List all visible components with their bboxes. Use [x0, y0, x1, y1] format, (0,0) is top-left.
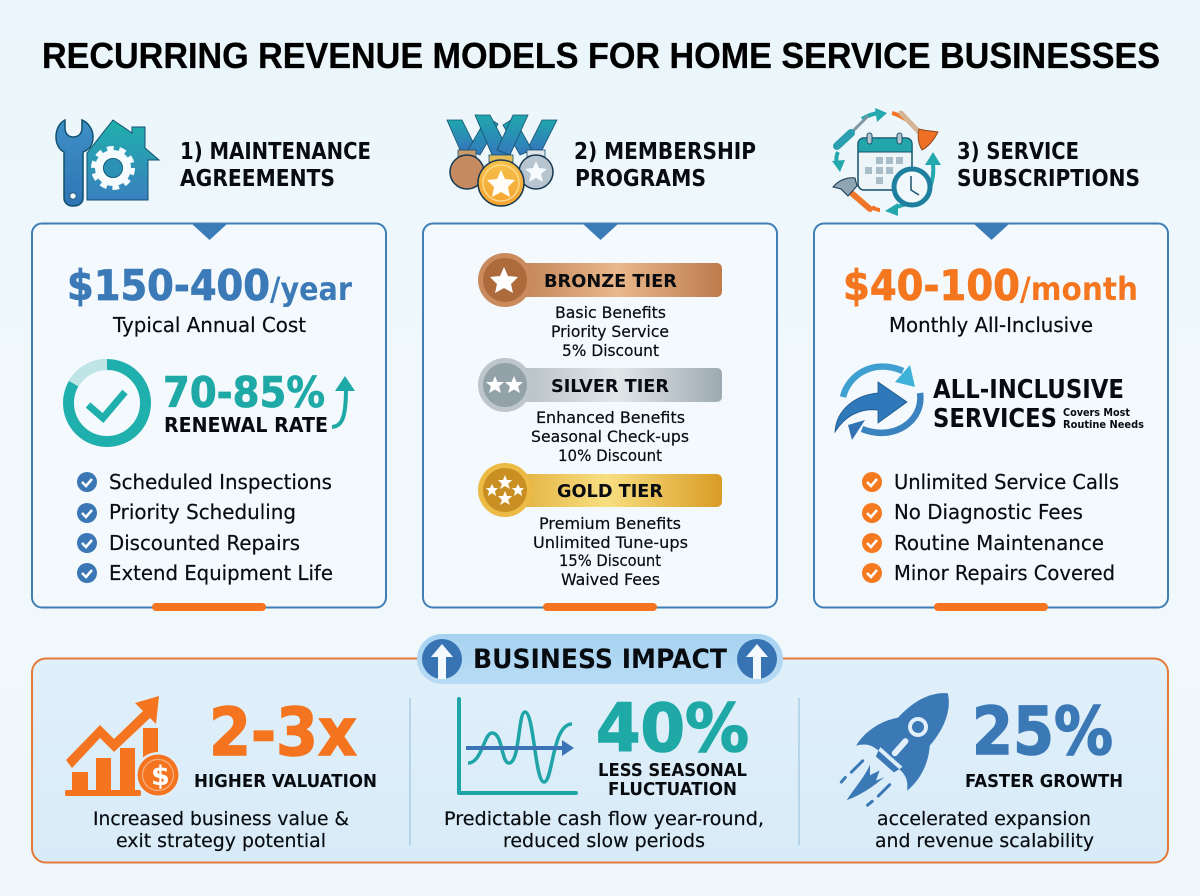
checklist: [77, 470, 333, 585]
icon: stabilized wave chart: [459, 699, 576, 793]
gold tier badge: [478, 463, 722, 517]
price: /year: [270, 270, 352, 308]
icon: wrench and house with gear: [56, 120, 159, 206]
all-inclusive services: ALL-INCLUSIVE: [933, 375, 1124, 405]
heading: service subscriptions: 3) SERVICE: [957, 139, 1079, 165]
all-inclusive services: Covers Most: [1063, 406, 1130, 419]
checklist: No Diagnostic Fees: [894, 500, 1083, 524]
price caption: Typical Annual Cost: [112, 313, 306, 337]
stat: valuation: HIGHER VALUATION: [194, 771, 377, 792]
heading: membership programs: [574, 139, 756, 192]
gold benefits: 15% Discount: [559, 551, 661, 570]
checklist: [862, 470, 1119, 585]
silver benefits: Seasonal Check-ups: [531, 427, 689, 446]
all-inclusive services: Routine Needs: [1063, 418, 1144, 431]
silver tier badge: [478, 358, 722, 412]
stat: seasonal fluctuation: 40%: [596, 690, 749, 767]
stat: faster growth: and revenue scalability: [875, 830, 1094, 852]
heading: service subscriptions: SUBSCRIPTIONS: [957, 166, 1140, 192]
title: RECURRING REVENUE MODELS FOR HOME SERVICE BUSINESSES: [42, 35, 1160, 76]
stat: valuation: 2-3x: [209, 694, 357, 771]
heading: membership programs: PROGRAMS: [575, 166, 706, 192]
stat: faster growth: accelerated expansion: [877, 808, 1091, 830]
checklist: Minor Repairs Covered: [894, 561, 1115, 585]
silver benefits: [531, 408, 689, 465]
stat: seasonal fluctuation: [444, 690, 764, 852]
checklist: Priority Scheduling: [109, 500, 296, 524]
icon: cycle arrows: [835, 365, 920, 440]
heading: maintenance agreements: 1) MAINTENANCE: [180, 139, 371, 165]
stat: seasonal fluctuation: reduced slow periods: [503, 830, 705, 852]
icon: renewal ring with check: [68, 364, 146, 442]
renewal rate: 70-85%: [163, 368, 325, 417]
price: /month: [1020, 270, 1138, 308]
renewal rate: RENEWAL RATE: [164, 413, 328, 437]
bronze benefits: [551, 303, 669, 360]
icon: rising bars and coin: $: [151, 761, 170, 792]
silver benefits: 10% Discount: [558, 446, 662, 465]
renewal rate: [163, 368, 355, 437]
panel: membership programs: [423, 224, 777, 611]
checklist: Extend Equipment Life: [109, 561, 333, 585]
silver benefits: Enhanced Benefits: [536, 408, 685, 427]
heading: service subscriptions: [957, 139, 1140, 192]
checklist: Scheduled Inspections: [109, 470, 332, 494]
stat: valuation: Increased business value &: [93, 808, 349, 830]
icon: calendar, clock and tools cycle: [832, 108, 941, 216]
bronze benefits: Priority Service: [551, 322, 669, 341]
stat: faster growth: 25%: [972, 693, 1113, 770]
panel: business impact: [32, 634, 1168, 862]
gold benefits: Unlimited Tune-ups: [533, 533, 688, 552]
silver tier badge: SILVER TIER: [551, 376, 669, 397]
checklist: Discounted Repairs: [109, 531, 300, 555]
checklist: Routine Maintenance: [894, 531, 1104, 555]
heading pill: [417, 634, 783, 684]
stat: seasonal fluctuation: Predictable cash flow year-round,: [444, 808, 764, 830]
icon: medals: [447, 115, 557, 206]
gold benefits: [533, 514, 688, 589]
price: $150-400: [67, 261, 270, 310]
heading pill: BUSINESS IMPACT: [473, 644, 728, 675]
bronze tier badge: [478, 253, 722, 307]
stat: faster growth: FASTER GROWTH: [965, 771, 1123, 792]
bronze benefits: 5% Discount: [562, 341, 659, 360]
bronze tier badge: BRONZE TIER: [544, 271, 677, 292]
panel: maintenance agreements: [32, 224, 386, 611]
all-inclusive services: [933, 375, 1144, 434]
panel: service subscriptions: [814, 224, 1168, 611]
price caption: Monthly All-Inclusive: [889, 313, 1093, 337]
price: [843, 261, 1138, 310]
icon: rising bars and coin: [65, 696, 181, 798]
bronze benefits: Basic Benefits: [555, 303, 666, 322]
all-inclusive services: SERVICES: [933, 404, 1057, 434]
gold benefits: Premium Benefits: [539, 514, 681, 533]
gold tier badge: GOLD TIER: [557, 481, 663, 502]
heading: maintenance agreements: [180, 139, 371, 192]
stat: seasonal fluctuation: FLUCTUATION: [608, 779, 737, 800]
gold benefits: Waived Fees: [561, 570, 660, 589]
checklist: Unlimited Service Calls: [894, 470, 1119, 494]
heading: membership programs: 2) MEMBERSHIP: [574, 139, 756, 165]
price: $40-100: [843, 261, 1020, 310]
stat: valuation: [93, 694, 377, 852]
stat: valuation: exit strategy potential: [116, 830, 326, 852]
icon: rocket: [824, 670, 974, 826]
heading: maintenance agreements: AGREEMENTS: [180, 166, 335, 192]
stat: faster growth: [875, 693, 1123, 852]
stat: seasonal fluctuation: LESS SEASONAL: [598, 760, 747, 781]
